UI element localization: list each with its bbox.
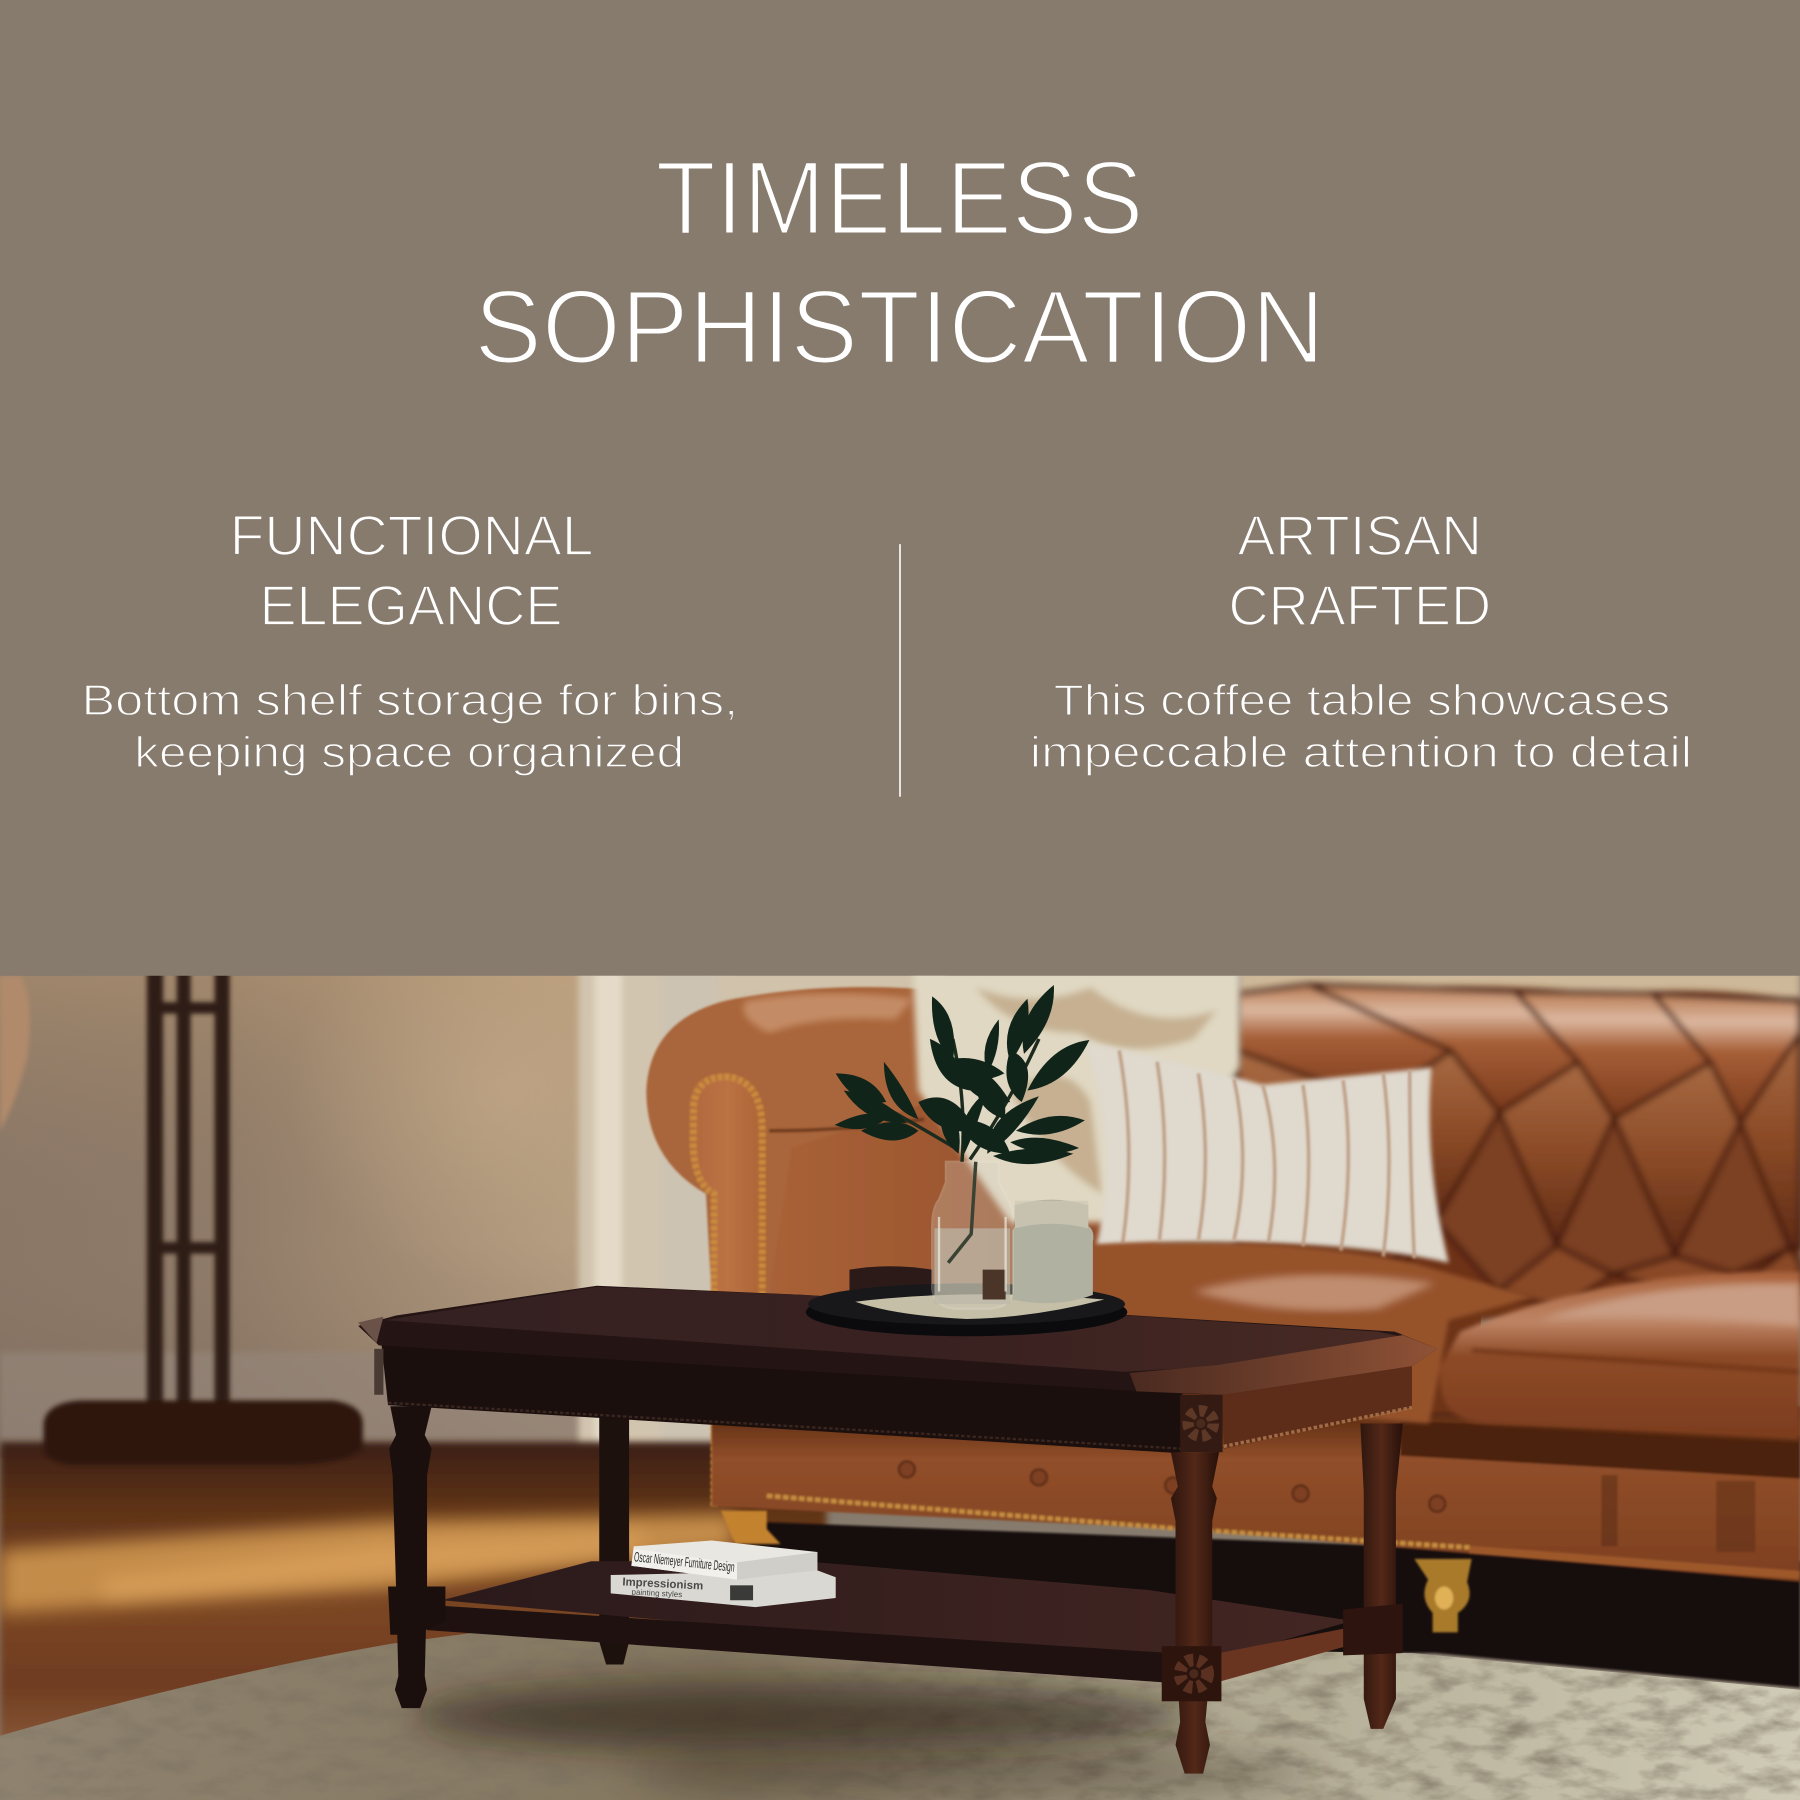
blurred side chair [0,976,30,1131]
bowl [849,1266,932,1297]
background panel [0,0,1800,976]
coffee table [358,1286,1437,1774]
back left leg [599,1414,629,1665]
heading: functional elegance: ELEGANCE [259,574,562,637]
leather sofa [646,983,1800,1632]
sofa gold feet [721,1511,1472,1632]
divider [899,544,901,797]
title: TIMELESS [655,140,1143,257]
floor lamp [44,970,363,1465]
books on shelf: painting styles [631,1588,682,1599]
right back leg [1360,1423,1403,1729]
black tray [806,1283,1127,1336]
seat cushions [1091,1242,1800,1441]
panel: artisan crafted [1030,504,1692,777]
title: SOPHISTICATION [474,269,1325,386]
heading: artisan crafted: ARTISAN [1238,504,1482,567]
panel: functional elegance [82,504,738,777]
text block: functional elegance description [82,677,738,777]
title [474,140,1325,386]
text block: functional elegance description: keeping space organized [134,729,684,777]
wall [0,976,734,1458]
dark shadow under sofa [735,1521,1800,1688]
text block: functional elegance description: Bottom shelf storage for bins, [82,677,738,725]
heading: functional elegance: FUNCTIONAL [230,504,593,567]
product photo scene [0,895,1800,1800]
lower shelf [427,1541,1383,1683]
heading: functional elegance [230,504,593,637]
shelf corner block right [1343,1604,1403,1655]
sofa body behind pillows [769,1104,1156,1296]
candle jar [1012,1200,1093,1303]
rosette block [1180,1395,1223,1452]
books on shelf: Oscar Niemeyer Furniture Design [633,1549,735,1575]
sofa lower tufted band [712,1406,1800,1582]
tray with decor [806,985,1127,1336]
floor [0,1442,827,1752]
front left leg [389,1406,432,1708]
text block: artisan crafted description: impeccable attention to detail [1030,729,1692,777]
glass vase [932,1162,1013,1309]
text block: artisan crafted description: This coffee table showcases [1054,677,1670,725]
heading: artisan crafted: CRAFTED [1228,574,1491,637]
table apron [381,1341,1412,1453]
front right leg [1171,1452,1219,1774]
sofa arm roll [646,987,930,1506]
wall moulding [579,970,1800,1458]
striped pillow [1085,1042,1449,1263]
books on shelf [611,1541,836,1607]
shelf corner rosette block [1162,1646,1221,1701]
table top surface [358,1286,1437,1395]
shelf corner block left [388,1586,445,1635]
books on shelf: Impressionism [622,1576,704,1593]
plant leaves [835,985,1089,1164]
heading: artisan crafted [1228,504,1491,637]
sofa back tufting [1238,983,1800,1320]
text block: artisan crafted description [1030,677,1692,777]
rug [0,1616,1800,1800]
patterned pillow [913,970,1240,1223]
